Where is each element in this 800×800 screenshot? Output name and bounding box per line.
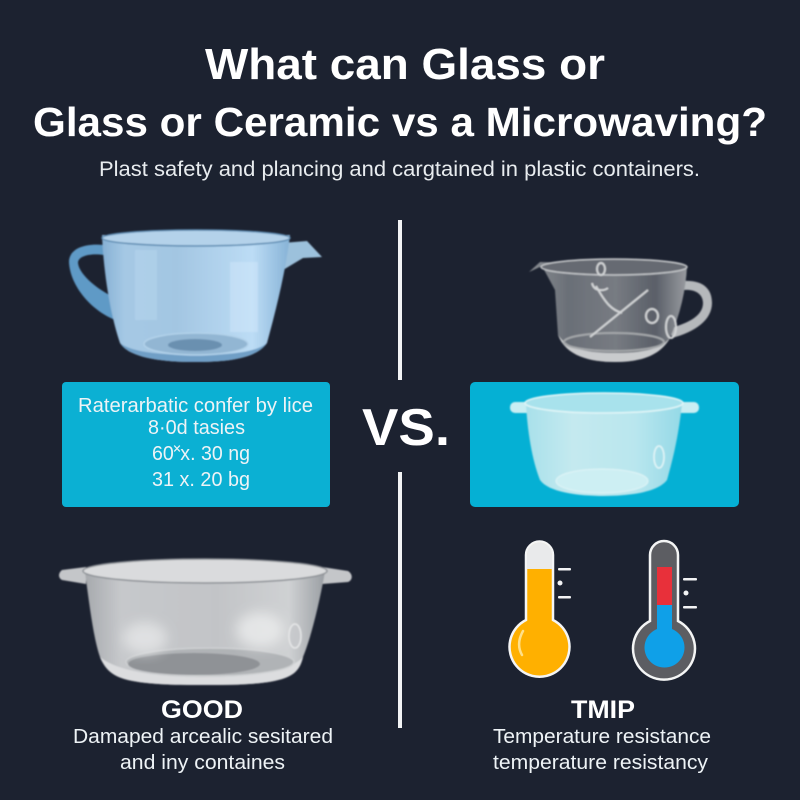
panel: teal bowl <box>470 382 739 507</box>
left caption: and iny containes <box>120 752 285 774</box>
panel text: 60˟x. 30 ng <box>152 443 250 465</box>
panel: dimensions <box>62 382 330 507</box>
title <box>33 40 767 145</box>
icon: large clear glass bowl <box>59 559 352 685</box>
tick marks <box>683 578 697 608</box>
title: What can Glass or <box>205 40 605 89</box>
icon: yellow thermometer <box>509 542 571 677</box>
subtitle: Plast safety and plancing and cargtained in plastic containers. <box>99 158 700 181</box>
right caption: TMIP <box>571 696 635 724</box>
icon: blue glass measuring cup <box>69 230 322 362</box>
right caption: Temperature resistance <box>493 726 711 748</box>
right caption <box>493 696 711 774</box>
icon: red and blue thermometer <box>633 541 697 680</box>
panel text: Raterarbatic confer by lice <box>78 395 313 417</box>
tick marks <box>558 568 571 598</box>
panel text <box>78 395 313 491</box>
title: Glass or Ceramic vs a Microwaving? <box>33 99 767 145</box>
panel text: 8·0d tasies <box>148 417 245 439</box>
icon: glass bowl on teal <box>510 393 699 496</box>
left caption: GOOD <box>161 696 243 724</box>
right caption: temperature resistancy <box>493 752 708 774</box>
VS label: VS. <box>362 399 450 457</box>
icon: clear glass cup with etched marks <box>529 259 712 362</box>
center divider <box>398 220 402 728</box>
panel text: 31 x. 20 bg <box>152 469 250 491</box>
left caption: Damaped arcealic sesitared <box>73 726 333 748</box>
left caption <box>73 696 333 774</box>
